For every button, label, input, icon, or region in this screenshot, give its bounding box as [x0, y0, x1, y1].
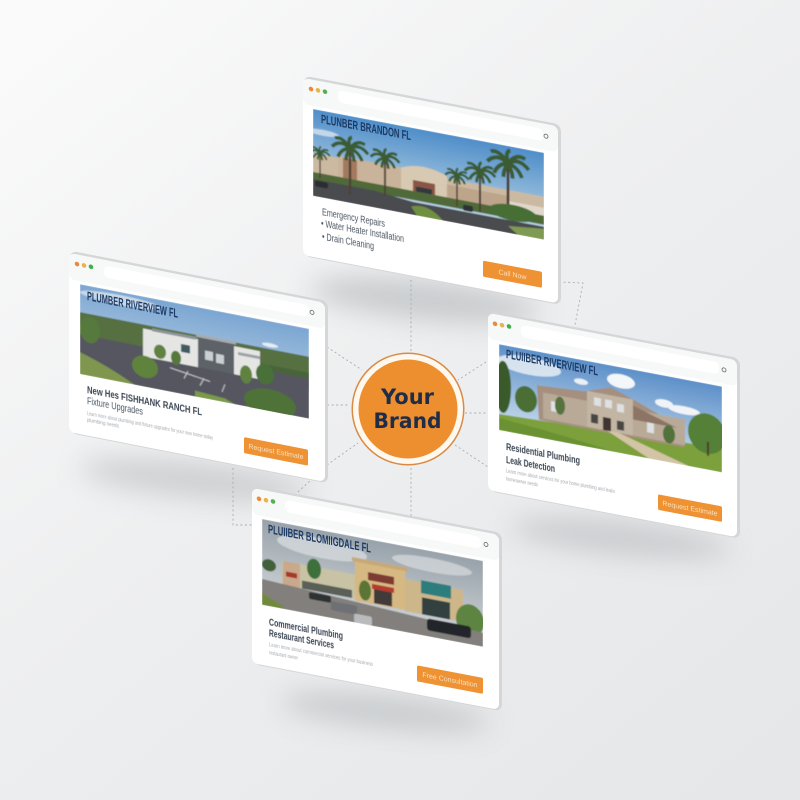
- button: Request Estimate: Request Estimate: [248, 444, 304, 461]
- service list: Emergency Repairs: [322, 206, 385, 230]
- button: Call Now: Call Now: [499, 269, 527, 282]
- button: Request Estimate: [658, 494, 722, 522]
- button: Request Estimate: Request Estimate: [662, 500, 718, 518]
- button: Request Estimate: [244, 437, 308, 466]
- button: Free Consultation: Free Consultation: [422, 672, 478, 689]
- headline and description: restaurant owner: [269, 650, 298, 662]
- browser frame edge: [489, 311, 740, 539]
- panel: Brandon FL browser card: [303, 76, 561, 305]
- button: Free Consultation: [417, 665, 483, 694]
- headline and description: homeowner needs: [506, 476, 538, 489]
- button: Call Now: [483, 261, 542, 288]
- browser window: [69, 253, 325, 482]
- headline and description: New Hes FISHHANK RANCH FL: [87, 384, 202, 418]
- service list: [321, 206, 404, 258]
- panel: Bloomingdale FL browser card: [252, 486, 502, 712]
- headline and description: Residential Plumbing: [506, 441, 580, 467]
- browser frame edge: [70, 251, 328, 484]
- headline and description: Fixture Upgrades: [87, 395, 143, 418]
- photo: palm trees and shopping centre: [307, 108, 544, 240]
- headline and description: [506, 441, 615, 503]
- title overlay: PLUIIBER RIVERVIEW FL: [506, 347, 598, 379]
- card shadows: [79, 268, 731, 739]
- photo: office building and parking lot: [80, 284, 309, 425]
- headline and description: Learn more about commercial services for your business: [269, 642, 373, 668]
- headline and description: Leak Detection: [506, 454, 555, 475]
- headline and description: Learn more about plumbing and fixture upgrades for your new home today: [87, 411, 213, 442]
- browser frame edge: [304, 76, 561, 305]
- headline and description: [87, 384, 213, 448]
- center badge: Your Brand: Brand: [374, 409, 442, 433]
- dotted connector lines: [233, 280, 583, 536]
- service list: • Drain Cleaning: [322, 231, 374, 252]
- headline and description: Commercial Plumbing: [269, 616, 343, 642]
- browser frame edge: [253, 486, 502, 712]
- photo: retail plaza with parked cars: [262, 519, 484, 647]
- headline and description: Learn more about services for your home plumbing and leaks: [506, 468, 615, 495]
- browser window: [303, 78, 558, 303]
- center badge: Your Brand: Your: [380, 385, 435, 409]
- service list: • Water Heater Installation: [321, 218, 404, 245]
- panel: Riverview FL residential browser card: [488, 310, 740, 539]
- headline and description: plumbing needs: [87, 418, 119, 430]
- center badge: Your Brand: [352, 352, 464, 466]
- browser window: [488, 313, 737, 537]
- headline and description: Restaurant Services: [269, 627, 334, 652]
- title overlay: PLUIIBER BLOMIIGDALE FL: [268, 522, 371, 556]
- photo: suburban house with lawn: [495, 343, 726, 473]
- title overlay: PLUMBER RIVERVIEW FL: [87, 289, 178, 321]
- title overlay: PLUNBER BRANDON FL: [321, 112, 411, 143]
- browser window: [252, 488, 499, 710]
- headline and description: [269, 616, 373, 676]
- panel: Riverview FL commercial browser card: [69, 250, 328, 484]
